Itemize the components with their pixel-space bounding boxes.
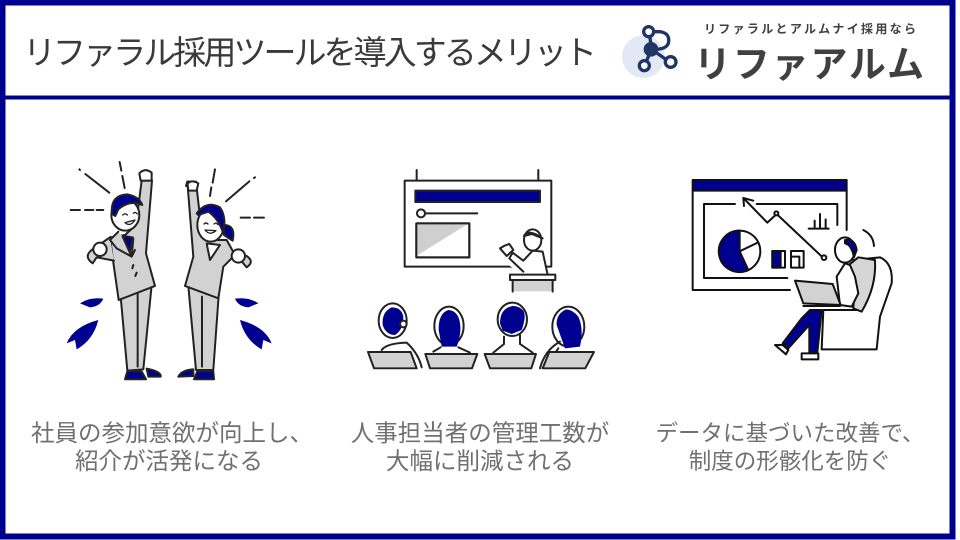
chairs bbox=[368, 352, 594, 368]
caption: データに基づいた改善で、 bbox=[655, 421, 925, 446]
woman bbox=[178, 181, 251, 379]
leaves bbox=[67, 298, 272, 349]
header divider bbox=[4, 96, 952, 100]
title: リファラル採用ツールを導入するメリット bbox=[23, 34, 597, 71]
logo tagline: リファラルとアルムナイ採用なら bbox=[704, 21, 916, 36]
armchair bbox=[822, 257, 892, 349]
legs bbox=[783, 310, 822, 353]
dashboard bbox=[693, 191, 847, 290]
caption: 社員の参加意欲が向上し、 bbox=[31, 420, 313, 446]
panel: presentation bbox=[351, 170, 609, 474]
logo wordmark: リファアルム bbox=[694, 44, 924, 85]
presenter bbox=[500, 229, 555, 292]
person bbox=[837, 263, 858, 307]
caption: 紹介が活発になる bbox=[75, 448, 263, 474]
caption: 人事担当者の管理工数が bbox=[351, 420, 609, 446]
caption: 大幅に削減される bbox=[386, 448, 574, 474]
emphasis lines bbox=[71, 162, 264, 218]
illustration: data analyst bbox=[693, 180, 892, 359]
caption: 制度の形骸化を防ぐ bbox=[689, 449, 891, 474]
panel: analysis bbox=[655, 180, 925, 474]
icon: logo network bbox=[622, 27, 676, 78]
panel: employees bbox=[31, 162, 313, 474]
screen bbox=[417, 170, 538, 181]
illustration: cheering employees bbox=[67, 162, 272, 379]
mini bars bbox=[809, 214, 829, 229]
audience bbox=[379, 303, 584, 368]
bars bbox=[772, 251, 785, 268]
illustration: seminar bbox=[368, 170, 594, 368]
man bbox=[88, 170, 161, 379]
logo bbox=[622, 21, 924, 85]
trend arrow bbox=[743, 198, 823, 257]
laptop bbox=[795, 281, 841, 305]
pie chart bbox=[719, 231, 760, 272]
